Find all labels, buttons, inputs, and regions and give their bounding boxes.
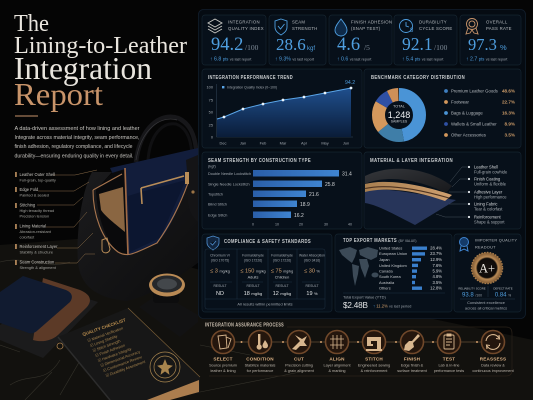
panel: benchmark category distribution xyxy=(364,69,521,148)
readout metrics xyxy=(458,286,513,298)
checklist items: ☑ Finish Adhesion xyxy=(95,343,126,358)
donut legend: Other Accessories xyxy=(451,132,486,138)
trend axis labels: 75 xyxy=(209,98,213,102)
market names: Canada xyxy=(379,268,393,274)
KPI: seam strength: SEAM xyxy=(292,20,305,24)
process step labels: TEST xyxy=(443,356,455,362)
seam axis: 0 xyxy=(252,222,254,226)
callout text: Lining Material xyxy=(20,224,46,228)
donut percentages: 16.3% xyxy=(502,110,515,116)
compliance standards: (ISO 3416) xyxy=(304,258,320,262)
intro paragraph: finish adhesion, regulatory compliance, and lifecycle xyxy=(14,144,133,150)
process step labels: & reinforcement xyxy=(361,369,388,373)
compliance limits: Adults xyxy=(248,274,258,280)
donut percentages: 48.6% xyxy=(502,88,515,94)
trend months: Mar xyxy=(280,140,287,146)
KPI: finish adhesion: ↑ 0.6 vs last report xyxy=(337,56,372,62)
market percentages: 28.4% xyxy=(430,246,442,250)
KPI: finish adhesion: FINISH ADHESION xyxy=(351,20,392,24)
callout leader lines xyxy=(37,170,97,263)
panel: top export markets xyxy=(335,234,452,312)
donut legend xyxy=(444,88,498,138)
panel: top export markets: TOP EXPORT MARKETS xyxy=(343,238,397,244)
title: The xyxy=(14,11,49,37)
layer labels: Shape & support xyxy=(474,220,505,224)
readout metrics: DEFECT RATE xyxy=(493,286,513,290)
bag opening trim xyxy=(93,183,188,255)
trend axis labels: 100 xyxy=(206,84,214,90)
seam bars xyxy=(253,170,339,218)
checklist items: ☑ Material Verification xyxy=(87,326,124,343)
KPI: integration quality index xyxy=(202,15,266,65)
callout text: colorfast xyxy=(20,234,35,240)
callout text: Full-grain, top-quality xyxy=(20,178,56,182)
total export value: Total Export Value (YTD) xyxy=(343,294,386,300)
process step labels: Stabilize materials xyxy=(245,364,276,368)
donut legend: Bags & Luggage xyxy=(451,110,483,116)
bag body xyxy=(78,170,199,301)
seam values: 18.9 xyxy=(300,202,310,208)
compliance results: RESULT xyxy=(275,284,289,288)
panel: integration performance trend: INTEGRATION PERFORMANCE TREND xyxy=(208,75,293,81)
layer labels: High performance xyxy=(474,194,507,200)
seam values: 31.4 xyxy=(342,172,352,178)
donut legend: Wallets & Small Leather xyxy=(451,122,497,126)
KPI: overall pass rate: OVERALL xyxy=(486,20,508,24)
process step labels: Edge finish & xyxy=(401,364,424,368)
donut total xyxy=(388,104,410,124)
trend months: May xyxy=(321,140,329,146)
loupe magnifier xyxy=(139,274,198,337)
compliance limits: ≤ 150 mg/kg xyxy=(240,268,266,274)
seam axis: 20 xyxy=(299,222,303,226)
compliance limits: ≤ 3 mg/kg xyxy=(210,268,230,274)
KPI: durability cycle score xyxy=(394,15,457,65)
callout text: Seam Construction xyxy=(20,260,55,264)
market percentages: 12.9% xyxy=(430,257,442,262)
KPI: integration quality index: /100 xyxy=(245,43,259,52)
KPI: durability cycle score: ↑ 5.4 pts vs last report xyxy=(402,56,444,62)
KPI: overall pass rate xyxy=(460,15,521,65)
layer labels: Leather Shell xyxy=(474,164,498,170)
process step labels: Layer alignment xyxy=(323,364,351,368)
intro paragraph: durability—ensuring enduring quality in every detail. xyxy=(14,154,134,160)
icon: finish brush xyxy=(404,334,420,351)
construction callouts xyxy=(15,170,97,270)
KPI: overall pass rate: 97.3 xyxy=(468,35,497,54)
process step labels: & grain alignment xyxy=(284,369,315,373)
market names: Australia xyxy=(379,280,395,285)
compliance standards: Formaldehyde xyxy=(242,254,264,258)
checklist items: ☑ Conformance Review xyxy=(103,355,142,373)
trend peak value: 94.2 xyxy=(345,80,355,86)
seam axis xyxy=(252,222,352,226)
icon: water drop xyxy=(335,19,347,36)
layered material illustration xyxy=(365,169,456,225)
KPI: seam strength: kgf xyxy=(307,46,315,52)
callout text: Strength & alignment xyxy=(20,265,57,270)
donut legend: Premium Leather Goods xyxy=(451,88,498,94)
donut total: SAMPLES xyxy=(391,120,408,124)
panel: importer quality readout: READOUT xyxy=(475,244,496,250)
trend months xyxy=(220,140,349,146)
callout text: Abrasion-resistant xyxy=(20,229,52,234)
KPI: integration quality index: QUALITY INDEX xyxy=(228,26,264,31)
compliance results: RESULT xyxy=(246,284,260,288)
trend axis labels: 0 xyxy=(211,134,214,140)
process step labels: for performance xyxy=(247,369,273,373)
panel: integration performance trend: Integration Quality Index (0–100) xyxy=(227,84,278,90)
process step labels: leather & lining xyxy=(210,369,236,373)
intro paragraph: Integrate across material integrity, seam performance, xyxy=(14,135,140,141)
intro paragraph xyxy=(14,126,140,160)
donut percentages: 3.5% xyxy=(505,132,515,138)
donut total: TOTAL xyxy=(393,104,405,108)
process step labels: CONDITION xyxy=(246,356,274,362)
KPI: integration quality index: 94.2 xyxy=(211,35,243,55)
icon: quality badge xyxy=(460,238,468,251)
seam axis: 10 xyxy=(275,222,279,226)
icon: sewing machine xyxy=(366,337,382,351)
icon: layers xyxy=(208,19,222,33)
seam axis: 40 xyxy=(348,222,352,226)
compliance limits xyxy=(210,268,321,280)
process step labels: surface treatment xyxy=(397,369,428,373)
process panel: integration assurance process xyxy=(205,322,515,376)
layer labels: Lining Fabric xyxy=(474,202,497,206)
panel: compliance and safety standards xyxy=(202,234,332,312)
process step labels: Data review & xyxy=(481,364,505,368)
compliance standards: Formaldehyde xyxy=(271,254,293,258)
callout text: Reinforcement Layer xyxy=(20,244,58,249)
trend months: Dec xyxy=(220,140,227,146)
KPI: integration quality index: INTEGRATION xyxy=(228,20,260,24)
seam row labels: Edge Stitch xyxy=(208,214,227,218)
layer labels: Tear & colorfast xyxy=(474,206,503,212)
market percentages xyxy=(430,246,442,290)
icon: reassess arrows xyxy=(486,335,500,349)
seam axis: 30 xyxy=(324,222,328,226)
checklist items xyxy=(87,326,147,378)
checklist title: QUALITY CHECKLIST xyxy=(82,317,127,337)
KPI: overall pass rate: PASS RATE xyxy=(486,26,512,31)
market bars xyxy=(412,246,427,290)
seam row labels xyxy=(208,172,251,218)
KPI: finish adhesion: 4.6 xyxy=(337,35,360,55)
panel: seam strength by construction type: (kgf) xyxy=(208,164,216,168)
donut percentages: 8.9% xyxy=(505,122,515,126)
title: Lining-to-Leather xyxy=(14,33,187,59)
icon: award rosette xyxy=(466,18,478,34)
readout summary xyxy=(465,300,507,310)
icon: test clipboard xyxy=(444,334,454,349)
compliance footnote: All results within permitted limits xyxy=(237,302,293,306)
KPI: durability cycle score: CYCLE SCORE xyxy=(419,26,453,31)
KPI: integration quality index: ↑ 6.8 pts vs last report xyxy=(210,56,252,62)
title xyxy=(14,11,187,112)
compliance results: ND xyxy=(216,291,224,297)
panel: top export markets: $2.48B xyxy=(343,301,369,310)
bag zipper xyxy=(141,176,184,204)
market percentages: 3.5% xyxy=(432,280,442,285)
KPI: seam strength: ↑ 9.3% vs last report xyxy=(275,56,315,62)
callout markers xyxy=(15,172,17,265)
callout text: High tenacity thread xyxy=(20,208,54,213)
KPI: overall pass rate: % xyxy=(500,43,507,52)
panel: material and layer integration xyxy=(364,152,521,229)
layer labels: Uniform & flexible xyxy=(474,182,507,186)
layer leader lines xyxy=(436,167,468,217)
bag photograph xyxy=(78,117,199,301)
market names: South Korea xyxy=(379,274,401,279)
process step labels: continuous improvement xyxy=(472,369,515,373)
KPI: durability cycle score: DURABILITY xyxy=(419,20,447,24)
market names: United States xyxy=(379,246,402,250)
seam values xyxy=(294,172,352,219)
title accent rule xyxy=(15,116,38,117)
compliance standards: Chromium VI xyxy=(210,254,230,258)
KPI: seam strength: 28.6 xyxy=(276,35,306,54)
seam values: 25.8 xyxy=(325,182,335,188)
seam row labels: Topstitch xyxy=(208,192,223,196)
process step labels: REASSESS xyxy=(480,356,506,362)
KPI: durability cycle score: 92.1 xyxy=(402,34,433,54)
market percentages: 23.7% xyxy=(430,251,442,256)
seam row labels: Blind Stitch xyxy=(208,202,227,206)
process step labels: & marking xyxy=(328,369,346,373)
trend months: Apr xyxy=(301,140,308,146)
KPI: finish adhesion xyxy=(329,15,392,65)
KPI: durability cycle score: /100 xyxy=(434,43,448,52)
panel: top export markets: ↑ 11.2% vs last period xyxy=(373,304,411,308)
panel: importer quality readout xyxy=(454,234,521,312)
title: Report xyxy=(14,76,103,112)
panel: material and layer integration: MATERIAL & LAYER INTEGRATION xyxy=(370,158,453,164)
KPI: finish adhesion: (SNAP TEST) xyxy=(351,26,381,31)
intro paragraph: A data-driven assessment of how lining and leather xyxy=(14,126,140,132)
icon: cut tool xyxy=(292,335,307,350)
layer labels: Reinforcement xyxy=(474,214,501,220)
compliance limits: ≤ 30 % xyxy=(304,268,321,274)
checklist items: ☑ Stitch Strength xyxy=(92,339,121,353)
process step labels: Precision cutting xyxy=(285,364,313,368)
compliance results: RESULT xyxy=(213,284,227,288)
checklist items: ☑ Lining Stability xyxy=(90,334,118,348)
bag strap xyxy=(186,155,198,222)
checklist items: ☑ Hardware Integrity xyxy=(97,347,132,363)
callout text: Precision tension xyxy=(20,214,49,218)
callout text: Leather Outer Shell xyxy=(20,172,55,177)
process step labels: Lab & in-line xyxy=(438,364,460,368)
compliance standards xyxy=(210,254,325,262)
compliance limits: Children xyxy=(275,274,289,280)
icon: shield check xyxy=(275,19,287,35)
process step labels: SELECT xyxy=(213,356,233,362)
readout summary: Consistent excellence xyxy=(467,300,505,305)
process step labels: performance tests xyxy=(434,369,464,373)
process step labels: STITCH xyxy=(365,356,383,362)
process connectors xyxy=(235,341,481,343)
market names: European Union xyxy=(379,251,407,256)
gold emblem xyxy=(150,352,180,382)
process step labels: Engineered sewing xyxy=(358,364,390,368)
trend legend xyxy=(222,86,224,88)
trend axis labels: 25 xyxy=(209,122,213,128)
callout text: Painted & sealed xyxy=(20,192,49,198)
compliance standards: (ISO 17075) xyxy=(211,258,229,262)
market percentages: 4.8% xyxy=(432,274,442,279)
process step labels: CUT xyxy=(294,356,304,362)
leather swatches xyxy=(0,276,98,358)
market percentages: 5.9% xyxy=(432,268,442,274)
bag handle xyxy=(136,117,197,165)
compliance results: RESULT xyxy=(305,284,319,288)
bag back navy panel xyxy=(110,148,198,256)
dashboard panel xyxy=(198,10,526,318)
market names: United Kingdom xyxy=(379,263,407,268)
panel: importer quality readout: IMPORTER QUALITY xyxy=(475,238,517,242)
process step labels: Source premium xyxy=(209,364,237,368)
seam values: 16.2 xyxy=(294,213,304,219)
donut percentages xyxy=(502,88,515,138)
grade seal: A+ xyxy=(479,262,495,276)
market names xyxy=(379,246,407,290)
callout text: Stitching xyxy=(20,202,36,208)
seam row labels: Single Needle Lockstitch xyxy=(208,182,250,186)
compliance results: 18 mg/kg xyxy=(244,291,262,297)
bag interior xyxy=(96,169,127,254)
title: Integration xyxy=(14,51,152,86)
trend axis labels: 50 xyxy=(209,110,214,114)
icon: condition thermometer xyxy=(257,334,268,350)
compliance table xyxy=(205,249,325,309)
KPI: seam strength xyxy=(269,15,326,65)
layer dots xyxy=(468,166,470,218)
process circles xyxy=(212,330,504,354)
bag hardware xyxy=(102,238,110,253)
panel: seam strength by construction type: SEAM STRENGTH BY CONSTRUCTION TYPE xyxy=(208,158,311,164)
process step labels: FINISH xyxy=(404,356,421,362)
market names: Others xyxy=(379,286,391,290)
seam values: 21.6 xyxy=(309,192,319,198)
callout text: Stability & structure xyxy=(20,250,53,254)
compliance results xyxy=(213,284,319,297)
trend months: Jan xyxy=(240,140,246,146)
panel: benchmark category distribution: BENCHMARK CATEGORY DISTRIBUTION xyxy=(371,75,465,81)
readout metrics: 0.84 % xyxy=(495,292,511,298)
compliance results: 12 mg/kg xyxy=(273,291,291,297)
layer labels xyxy=(474,164,508,224)
callout text xyxy=(20,172,58,270)
icon: cycle gauge: 8 xyxy=(410,28,414,34)
KPI: finish adhesion: /5 xyxy=(364,43,370,52)
layer labels: Adhesive Layer xyxy=(474,190,503,194)
compliance standards: Water Absorption xyxy=(299,254,325,258)
readout summary: across all critical metrics xyxy=(465,306,507,310)
compliance limits: ≤ 75 mg/kg xyxy=(271,268,293,274)
process panel: integration assurance process: INTEGRATION ASSURANCE PROCESS xyxy=(205,322,284,328)
process step labels: ALIGN xyxy=(329,356,345,362)
quality checklist notebook xyxy=(57,308,200,400)
panel: top export markets: (BY VALUE) xyxy=(398,239,417,243)
process step labels xyxy=(209,356,515,373)
trend axis labels xyxy=(206,84,214,140)
trend months: Feb xyxy=(260,140,266,146)
readout metrics: 93.8 /100 xyxy=(462,292,482,298)
donut percentages: 22.7% xyxy=(502,100,515,104)
layer labels: Finish Coating xyxy=(474,176,501,182)
trend months: Jun xyxy=(343,140,349,146)
icon: compliance shield xyxy=(207,236,219,250)
icon: align grid xyxy=(330,335,344,349)
panel: compliance and safety standards: COMPLIANCE & SAFETY STANDARDS xyxy=(224,239,311,245)
layer labels: Full-grain cowhide xyxy=(474,170,508,174)
market percentages: 7.6% xyxy=(432,263,442,268)
seam row labels: Double Needle Lockstitch xyxy=(208,172,251,176)
KPI: seam strength: STRENGTH xyxy=(292,26,318,31)
trend data points xyxy=(223,87,352,118)
donut chart xyxy=(378,94,420,136)
readout metrics: RELIABILITY SCORE xyxy=(458,286,486,290)
KPI: overall pass rate: ↑ 2.7 pts vs last report xyxy=(466,56,508,62)
trend area chart xyxy=(217,88,351,137)
donut total: 1,248 xyxy=(388,110,410,120)
market percentages: 12.8% xyxy=(430,286,442,290)
compliance standards: (ISO 17226) xyxy=(244,258,262,262)
callout text: Edge Fold xyxy=(20,187,39,192)
compliance standards: (ISO 17226) xyxy=(273,258,291,262)
market names: Japan xyxy=(379,257,390,262)
panel: seam strength by construction type xyxy=(202,152,362,229)
world map xyxy=(339,247,378,286)
donut legend: Footwear xyxy=(451,100,469,104)
checklist items: ☑ Durability Assessment xyxy=(105,360,147,378)
checklist items: ☑ Dimensional Accuracy xyxy=(100,350,141,368)
panel: integration performance trend xyxy=(202,69,362,148)
compliance results: 19 % xyxy=(306,291,318,297)
icon: select swatches xyxy=(218,335,231,349)
